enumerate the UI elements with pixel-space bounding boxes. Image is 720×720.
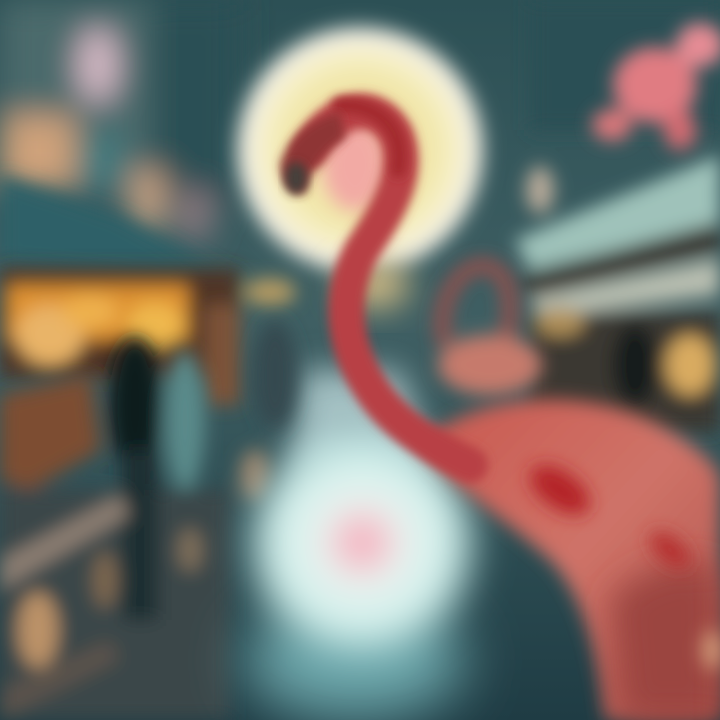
body dark red marks [522, 456, 720, 670]
flamingo [280, 105, 720, 720]
halo lower yellow spill [340, 261, 410, 309]
right buildings [515, 0, 720, 432]
left buildings [0, 0, 240, 243]
left awning [0, 175, 240, 300]
left lower street and people [0, 320, 297, 720]
body shadow [610, 564, 720, 720]
left shop lights [0, 268, 296, 405]
neck [310, 111, 470, 465]
beak tip [285, 162, 307, 194]
neck highlight [340, 105, 399, 170]
background flamingo [438, 266, 542, 395]
central street pale reflection [290, 370, 440, 480]
glowing halo [232, 22, 488, 278]
head and beak [280, 112, 345, 194]
pink flower sign [592, 23, 720, 150]
halo inner pink [323, 119, 387, 211]
bottom glowing orb [237, 430, 487, 720]
body [420, 399, 720, 720]
